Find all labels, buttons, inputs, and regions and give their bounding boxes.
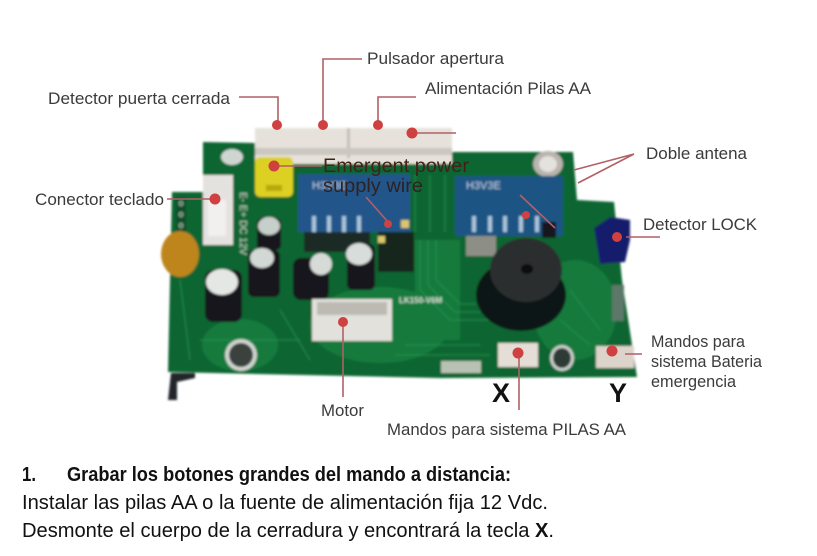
instruction heading: Grabar los botones grandes del mando a distancia: <box>67 464 511 486</box>
label: mandos pilas: Mandos para sistema PILAS AA <box>387 420 627 439</box>
circuit board photo: o <box>178 209 184 219</box>
circuit board photo: H3V3E <box>466 180 501 192</box>
bottom right hole <box>550 345 574 371</box>
header row <box>441 361 481 373</box>
overlaid board caption: Emergent power <box>323 156 470 177</box>
board outline <box>168 142 637 378</box>
instruction line 2: Desmonte el cuerpo de la cerradura y encontrará la tecla X. <box>22 520 554 542</box>
label: alimentacion: Alimentación Pilas AA <box>425 79 592 98</box>
button letter Y: Y <box>609 378 627 408</box>
side pin header <box>612 285 624 321</box>
instruction heading: 1. <box>22 464 36 486</box>
mounting hole top right <box>533 151 563 177</box>
button Y <box>596 346 634 368</box>
electrolytic capacitors <box>205 217 375 322</box>
buzzer <box>476 259 566 331</box>
overlaid board caption: supply wire <box>323 176 423 197</box>
orange capacitor <box>161 231 199 277</box>
left tab pins <box>176 198 186 238</box>
label: mandos bateria: Mandos para <box>651 332 746 351</box>
blue modules <box>298 174 410 232</box>
board text: LK150-V6M <box>399 296 442 305</box>
label: detector puerta: Detector puerta cerrada <box>48 89 231 108</box>
circuit board photo: H3V3E <box>312 180 347 192</box>
bottom left hole <box>225 339 257 371</box>
circuit board photo: o <box>178 220 184 230</box>
instructions text <box>22 464 554 542</box>
label: conector teclado: Conector teclado <box>35 190 164 209</box>
instruction line 1: Instalar las pilas AA o la fuente de alimentación fija 12 Vdc. <box>22 492 548 514</box>
lighter green pcb areas <box>202 240 617 371</box>
callout lines and dots <box>167 59 660 410</box>
yellow connector <box>255 157 293 197</box>
motor connector <box>312 299 392 341</box>
component labels <box>35 49 763 439</box>
circuit board photo: o <box>178 198 184 208</box>
label: doble antena: Doble antena <box>646 144 748 163</box>
label: pulsador: Pulsador apertura <box>367 49 505 68</box>
keypad connector <box>203 175 233 245</box>
label: motor: Motor <box>321 401 364 420</box>
blue jumper <box>594 217 630 264</box>
pcb traces <box>180 175 600 360</box>
black latch <box>168 373 195 400</box>
black chips <box>304 232 370 252</box>
overlaid board caption <box>323 156 470 197</box>
button letter X: X <box>492 378 510 408</box>
circuit board photo <box>161 128 637 400</box>
label: mandos bateria <box>651 332 763 391</box>
button X <box>498 343 538 367</box>
label: detector lock: Detector LOCK <box>643 215 758 234</box>
label: mandos bateria: sistema Bateria <box>651 352 763 371</box>
mounting hole top left <box>221 149 243 165</box>
label: mandos bateria: emergencia <box>651 372 737 391</box>
board silk labels: E- E+ DC 12V <box>237 192 248 255</box>
top white connectors <box>255 128 452 164</box>
gold contacts <box>401 220 409 228</box>
